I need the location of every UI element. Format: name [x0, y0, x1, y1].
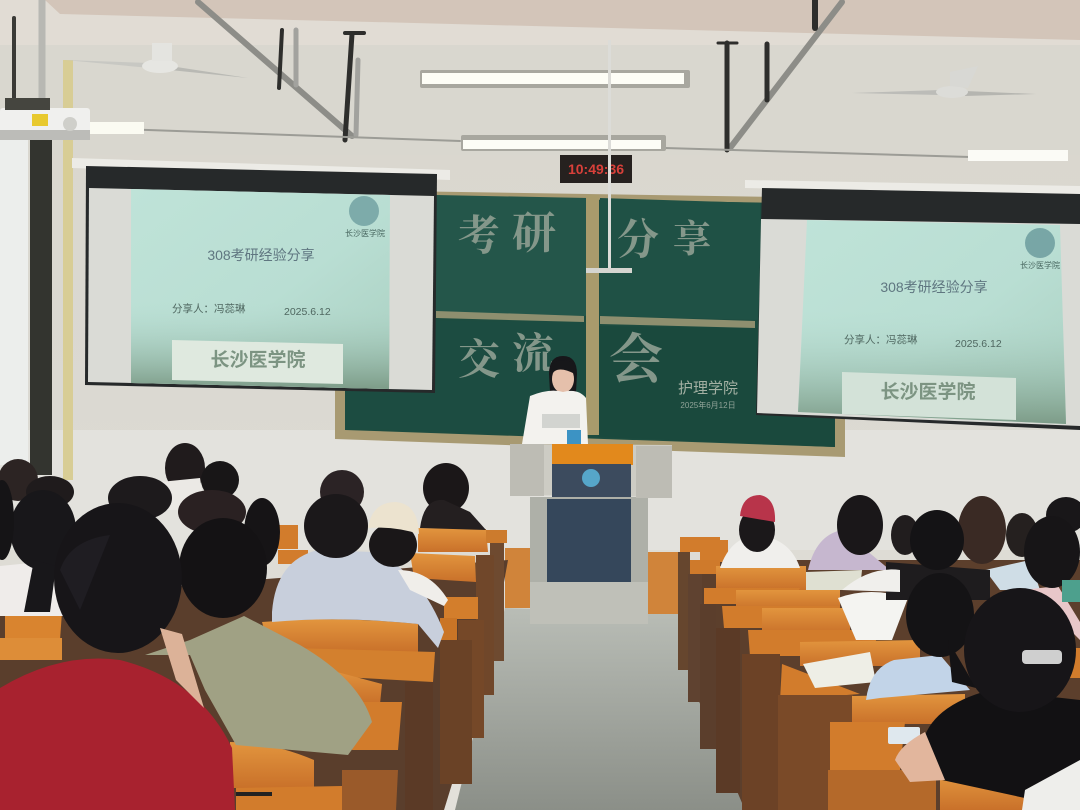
back students left: [0, 443, 364, 616]
speaker: [522, 356, 588, 444]
chalk title: 交: [458, 327, 501, 387]
left projection screen: 308考研经验分享: [207, 247, 315, 263]
student in red shirt: [0, 503, 235, 810]
student with white hat: [368, 502, 448, 606]
right block furniture base: [678, 560, 1080, 810]
notebook on desk: [888, 727, 920, 744]
chalk title: 考: [458, 203, 500, 263]
blackboard: [335, 190, 845, 457]
student blue shirt right: [866, 573, 976, 700]
chalk title: 会: [609, 317, 663, 394]
right projection screen: 长沙医学院: [880, 380, 976, 403]
student with striped shirt: [272, 494, 444, 648]
wall wainscot near lectern: [505, 548, 682, 614]
chalk title: 研: [512, 197, 556, 261]
left projection screen: 2025.6.12: [284, 306, 331, 318]
fluorescent lights: [90, 70, 1068, 161]
right block desks: [678, 537, 1080, 810]
student pink shirt right: [1005, 516, 1080, 640]
right projection screen: 分享人：冯蕊琳: [844, 333, 918, 346]
floor aisle: [455, 608, 770, 810]
microphone pole: [586, 40, 632, 273]
digital clock: 10:49:36: [568, 161, 624, 177]
left projection screen: 长沙医学院: [345, 228, 385, 238]
left projection screen: 分享人：冯蕊琳: [172, 302, 246, 315]
projector: [0, 98, 90, 140]
right projection screen: 2025.6.12: [955, 338, 1002, 350]
chalk title: [458, 197, 711, 394]
left projection screen: [72, 158, 450, 393]
lectern: [510, 444, 672, 624]
pen on desk: [236, 792, 272, 796]
chalk signature: 护理学院: [678, 379, 738, 397]
left wall pillar and trim: [0, 60, 73, 480]
paper on desk: [803, 652, 876, 688]
student with ponytail: [420, 463, 486, 530]
left block furniture base: [0, 560, 508, 810]
chalk title: 分: [617, 207, 659, 267]
back students right: [720, 495, 1080, 600]
chalk title: 享: [673, 208, 711, 263]
right projection screen: 308考研经验分享: [880, 279, 988, 295]
digital clock: [560, 155, 632, 183]
ceiling fan left: [65, 43, 248, 78]
right projection screen: 长沙医学院: [1020, 260, 1060, 270]
student in black top foreground: [895, 588, 1080, 810]
ceiling: [0, 0, 1080, 550]
left block desks: [0, 525, 507, 810]
white nurse cap: [838, 592, 908, 640]
ceiling fan right: [852, 66, 1036, 98]
right projection screen: [745, 180, 1080, 430]
chalk title: 流: [512, 321, 555, 381]
student in olive jacket: [145, 518, 372, 755]
ceiling pipes: [14, 0, 970, 157]
left projection screen: 长沙医学院: [210, 348, 306, 371]
chalk signature: 2025年6月12日: [680, 400, 736, 410]
chalk signature: [678, 379, 738, 410]
